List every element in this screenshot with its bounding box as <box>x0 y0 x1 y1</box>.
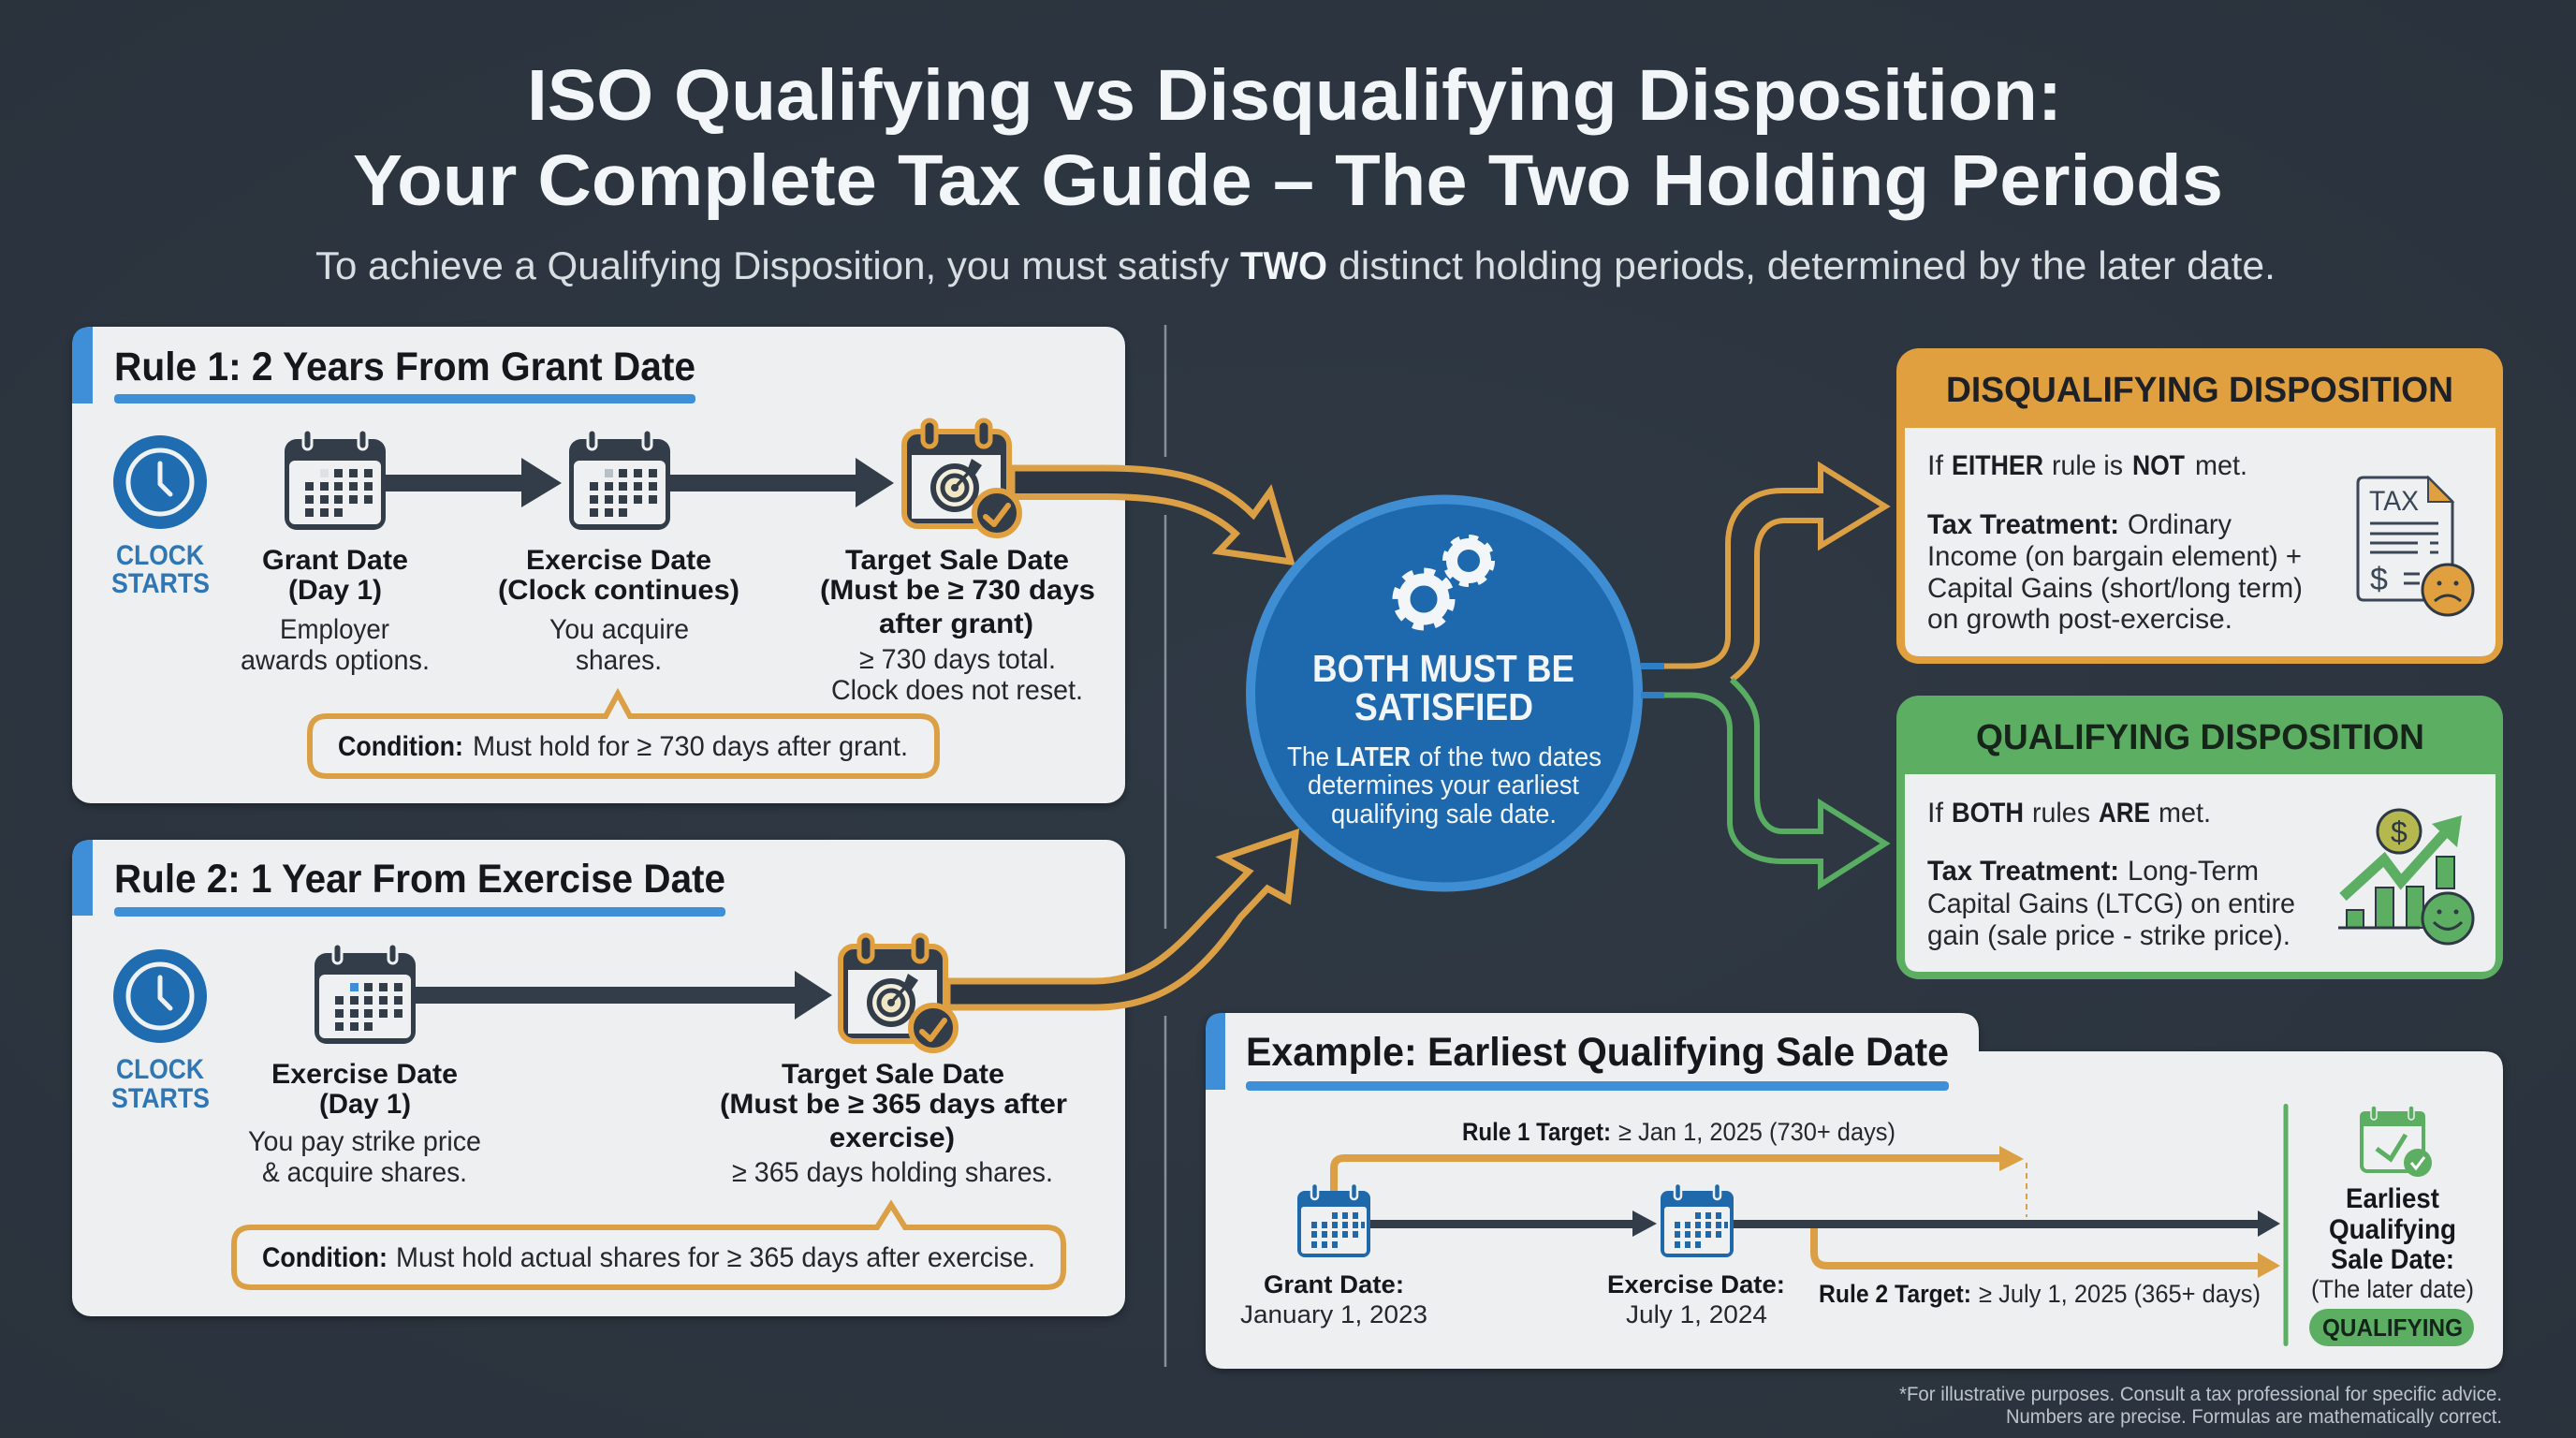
heading underline: rule 1 <box>114 394 695 404</box>
text: condition: BOTH <box>1952 798 2024 829</box>
panel: example <box>1206 1013 2503 1369</box>
icon: tax document with sad face <box>2358 477 2473 615</box>
callout: rule 1 condition: Must hold for ≥ 730 days after grant. <box>473 731 908 762</box>
text: exercise date <box>498 545 739 676</box>
panel: rule 2 <box>72 840 1125 1316</box>
text: earliest qualifying sale date: Earliest <box>2346 1183 2439 1214</box>
text: tax treatment: Tax Treatment: <box>1927 509 2119 540</box>
text: grant date <box>1240 1270 1427 1328</box>
icon: growth chart with smile <box>2338 810 2473 944</box>
arrow: grant to exercise <box>386 458 562 507</box>
center text: LATER <box>1336 742 1411 772</box>
text: tax treatment: Capital Gains (short/long term) <box>1927 573 2303 604</box>
subtitle <box>315 243 2276 287</box>
rule 1 target label <box>1462 1118 1895 1146</box>
text: grant date: (Day 1) <box>288 575 382 606</box>
title: ISO Qualifying vs Disqualifying Disposition: <box>527 55 2062 136</box>
panel: rule 1 <box>72 327 1125 803</box>
arrow: rule 1 target <box>1334 1158 2003 1191</box>
panel: qualifying disposition <box>1896 696 2503 979</box>
footnote <box>1899 1384 2502 1428</box>
icon: exercise calendar <box>569 430 670 530</box>
text: exercise date: You pay strike price <box>248 1126 481 1157</box>
text: target sale date <box>720 1059 1067 1188</box>
center heading: BOTH MUST BE <box>1312 647 1574 690</box>
center text: of the two dates <box>1419 742 1602 772</box>
text: grant date: Grant Date <box>262 545 408 576</box>
arrow: exercise to target <box>416 971 832 1020</box>
heading: disqualifying: DISQUALIFYING DISPOSITION <box>1946 371 2453 410</box>
text: condition: rule is <box>2052 450 2123 481</box>
text: grant date <box>241 545 430 676</box>
text: exercise date: shares. <box>576 645 662 676</box>
text: tax treatment: Ordinary <box>2128 509 2232 540</box>
text: exercise date: Exercise Date <box>271 1059 458 1090</box>
text: target sale date: Clock does not reset. <box>831 675 1083 706</box>
heading: rule 2: Rule 2: 1 Year From Exercise Date <box>114 857 725 902</box>
icon: growth chart with smile: $ <box>2391 815 2408 849</box>
blue tab: rule 2 <box>72 840 93 916</box>
text: grant date: Grant Date: <box>1264 1270 1404 1299</box>
callout: rule 2 condition: Must hold actual shares for ≥ 365 days after exercise. <box>396 1242 1035 1273</box>
center heading: SATISFIED <box>1354 685 1533 728</box>
center circle: both must be satisfied <box>1251 500 1638 888</box>
text: tax treatment <box>1927 856 2295 951</box>
text: exercise date: Exercise Date: <box>1607 1270 1785 1299</box>
rule 2 target label <box>1819 1280 2261 1308</box>
text: target sale date: Target Sale Date <box>782 1059 1004 1090</box>
text: target sale date: after grant) <box>879 609 1033 639</box>
text: condition: rules <box>2032 798 2090 829</box>
icon: exercise calendar <box>1661 1183 1734 1257</box>
icon: rule 2 target calendar <box>841 935 956 1050</box>
rule 2 target label: Rule 2 Target: <box>1819 1280 1971 1308</box>
text: condition: NOT <box>2132 450 2185 481</box>
clock starts label <box>111 540 210 599</box>
text: exercise date <box>1607 1270 1785 1328</box>
text: tax treatment: Capital Gains (LTCG) on entire <box>1927 888 2295 919</box>
footnote: Numbers are precise. Formulas are mathematically correct. <box>2006 1406 2502 1428</box>
rule 1 target label: Rule 1 Target: <box>1462 1118 1611 1146</box>
text: exercise date: & acquire shares. <box>262 1157 467 1188</box>
text: target sale date: Target Sale Date <box>845 545 1069 576</box>
text: condition: If <box>1927 798 1944 829</box>
text: target sale date: (Must be ≥ 730 days <box>820 575 1095 606</box>
callout: rule 1 condition: Condition: <box>338 731 463 762</box>
text: earliest qualifying sale date <box>2311 1183 2474 1303</box>
subtitle: TWO <box>1240 243 1327 287</box>
clock starts label: CLOCK <box>116 540 204 571</box>
text: condition <box>1927 798 2211 829</box>
text: target sale date: exercise) <box>829 1123 955 1153</box>
subtitle: distinct holding periods, determined by the later date. <box>1339 243 2276 287</box>
timeline arrows <box>1370 1211 2280 1237</box>
text: exercise date: July 1, 2024 <box>1626 1300 1767 1328</box>
text: condition: met. <box>2159 798 2211 829</box>
text: target sale date: ≥ 365 days holding shares. <box>732 1157 1053 1188</box>
text: target sale date: ≥ 730 days total. <box>859 644 1056 675</box>
text: exercise date: You acquire <box>549 614 689 645</box>
text: condition: ARE <box>2099 798 2150 829</box>
icon: green calendar <box>2360 1106 2432 1177</box>
qualifying badge: QUALIFYING <box>2322 1313 2463 1342</box>
heading: example: Example: Earliest Qualifying Sale Date <box>1246 1030 1949 1075</box>
arrow: center to disqualifying <box>1664 466 1885 680</box>
text: exercise date: (Day 1) <box>319 1089 411 1120</box>
text: tax treatment: Income (on bargain element) + <box>1927 541 2302 572</box>
qualifying badge <box>2309 1309 2474 1346</box>
text: earliest qualifying sale date: (The later date) <box>2311 1275 2474 1303</box>
heading: qualifying: QUALIFYING DISPOSITION <box>1976 718 2424 757</box>
center heading <box>1312 647 1574 728</box>
text: condition: If <box>1927 450 1944 481</box>
clock starts label: CLOCK <box>116 1054 204 1085</box>
text: exercise date: (Clock continues) <box>498 575 739 606</box>
icon: rule 1 target calendar <box>904 420 1019 536</box>
heading underline: rule 2 <box>114 907 725 917</box>
text: tax treatment: Long-Term <box>2128 856 2259 887</box>
icon: grant calendar <box>285 430 386 530</box>
text: tax treatment: Tax Treatment: <box>1927 856 2119 887</box>
center text <box>1287 742 1602 829</box>
footnote: *For illustrative purposes. Consult a tax professional for specific advice. <box>1899 1384 2502 1405</box>
icon: clock <box>113 949 207 1043</box>
icon: tax document with sad face: $ <box>2370 562 2388 597</box>
subtitle: To achieve a Qualifying Disposition, you must satisfy <box>315 243 1229 287</box>
text: exercise date <box>248 1059 481 1188</box>
text: tax treatment <box>1927 509 2303 635</box>
center text: determines your earliest <box>1308 770 1579 800</box>
icon: clock <box>113 435 207 529</box>
callout: rule 2 condition <box>234 1205 1063 1287</box>
text: condition <box>1927 450 2247 481</box>
rule 1 target label: ≥ Jan 1, 2025 (730+ days) <box>1618 1118 1895 1146</box>
arrow: exercise to target <box>669 458 894 507</box>
arrow: rule 2 target <box>1814 1224 2261 1266</box>
heading underline: example <box>1246 1081 1949 1091</box>
green divider <box>2284 1104 2288 1346</box>
heading: rule 1: Rule 1: 2 Years From Grant Date <box>114 345 695 389</box>
panel: disqualifying disposition <box>1896 348 2503 664</box>
title <box>353 55 2223 221</box>
icon: tax document with sad face: TAX <box>2369 486 2419 517</box>
text: target sale date <box>820 545 1095 706</box>
center text: The <box>1287 742 1329 772</box>
text: earliest qualifying sale date: Qualifying <box>2329 1214 2456 1245</box>
rule 2 target label: ≥ July 1, 2025 (365+ days) <box>1979 1280 2261 1308</box>
center text: qualifying sale date. <box>1331 800 1557 829</box>
text: earliest qualifying sale date: Sale Date: <box>2331 1244 2454 1275</box>
text: exercise date: Exercise Date <box>526 545 711 576</box>
icon: gears <box>1397 537 1492 626</box>
text: grant date: Employer <box>280 614 389 645</box>
callout: rule 1 condition <box>310 694 937 776</box>
clock starts label: STARTS <box>111 568 210 599</box>
arrow: rule 2 to center <box>947 833 1295 1007</box>
connector stubs <box>1641 663 1664 698</box>
callout: rule 2 condition: Condition: <box>262 1242 388 1273</box>
text: target sale date: (Must be ≥ 365 days after <box>720 1089 1067 1120</box>
title: Your Complete Tax Guide – The Two Holding Periods <box>353 140 2223 221</box>
text: tax treatment: gain (sale price - strike price). <box>1927 920 2291 951</box>
clock starts label <box>111 1054 210 1114</box>
icon: grant calendar <box>1297 1183 1370 1257</box>
divider lines <box>1164 325 1166 1367</box>
blue tab: rule 1 <box>72 327 93 404</box>
icon: exercise calendar <box>315 944 416 1044</box>
text: condition: EITHER <box>1952 450 2043 481</box>
text: tax treatment: on growth post-exercise. <box>1927 604 2232 635</box>
blue tab: example <box>1206 1013 1225 1090</box>
arrow: center to qualifying <box>1664 680 1885 885</box>
clock starts label: STARTS <box>111 1083 210 1114</box>
text: grant date: awards options. <box>241 645 430 676</box>
text: grant date: January 1, 2023 <box>1240 1300 1427 1328</box>
arrow: rule 1 to center <box>1012 468 1291 562</box>
text: condition: met. <box>2195 450 2247 481</box>
